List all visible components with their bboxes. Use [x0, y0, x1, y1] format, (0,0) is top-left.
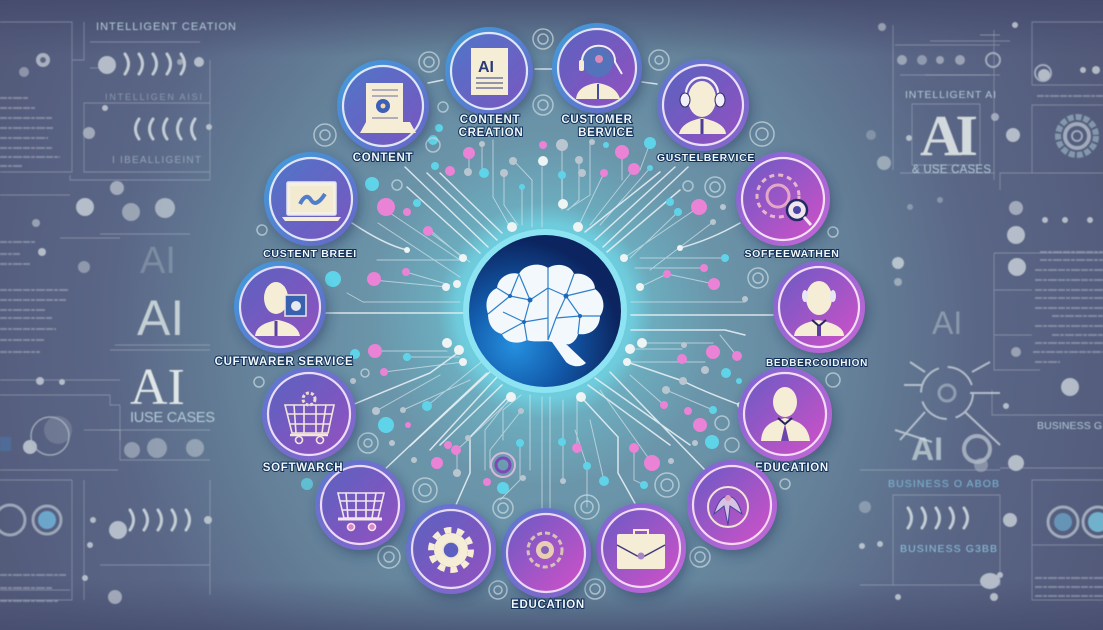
label: business garbled: BEDBERCOIDHION [766, 358, 868, 369]
icon: person with headset [679, 78, 726, 134]
icon: network gear [528, 533, 562, 567]
hub ring and core [463, 229, 627, 393]
icon: gear with magnifier [757, 175, 811, 225]
node: headset agent [657, 59, 749, 151]
node: emblem [687, 460, 777, 550]
heading: intelligent creation: INTELLIGENT CEATION [96, 21, 237, 33]
node: customer with chip [234, 261, 326, 353]
label: creation: CREATION [459, 127, 523, 139]
heading: intelligent AI: INTELLIGENT AI [905, 89, 997, 101]
node: gear [406, 504, 496, 594]
node: education gear [501, 508, 591, 598]
chevron row [908, 508, 968, 528]
node: bald man [773, 261, 865, 353]
rays: upper right [562, 142, 773, 315]
label: customer: CUSTOMER [561, 114, 633, 126]
radiating circuit lines [323, 140, 773, 510]
label: service: BERVICE [578, 127, 634, 139]
cyan dots [301, 124, 742, 494]
node: education man [738, 367, 832, 461]
label: customer service garbled: GUSTELBERVICE [657, 152, 755, 164]
label: software search: SOFTWARCH [263, 462, 343, 474]
node: laptop [264, 152, 358, 246]
circuit frames [859, 22, 1103, 601]
node: software [736, 152, 830, 246]
label: education bottom: EDUCATION [511, 599, 585, 611]
label: education right: EDUCATION [755, 462, 829, 474]
icon: shopping cart [338, 493, 384, 530]
icon: brain [486, 265, 603, 366]
label: software garbled: SOFFEEWATHEN [744, 248, 840, 260]
serif AI mark: AI [130, 359, 185, 416]
label: content brief garbled: CUSTENT BREEI [263, 248, 357, 260]
white and grey dots [349, 156, 743, 408]
icon: gear [431, 530, 471, 570]
circuit frames [0, 22, 212, 604]
node connector lines [428, 69, 657, 84]
faint label: intelligent lower: I IBEALLIGEINT [112, 155, 202, 166]
business label: BUSINESS O ABOB [888, 478, 1000, 490]
rays: upper left [323, 140, 562, 313]
large AI mark: AI [137, 290, 184, 346]
central brain hub [463, 229, 627, 393]
dial graphic [895, 362, 1000, 445]
business label right: BUSINESS G [1037, 420, 1103, 432]
faint AI mark: AI [932, 305, 962, 341]
small ring icons [254, 29, 840, 599]
chevron row middle [136, 119, 195, 139]
node: shopping cart upper [262, 367, 356, 461]
use cases caption: & USE CASES [912, 164, 992, 176]
node: shopping cart lower [315, 460, 405, 550]
icon: laptop [282, 182, 341, 221]
icon: cart with gear [285, 393, 334, 444]
AI near dial: AI [911, 431, 943, 467]
icon: person with chip [255, 282, 306, 336]
use cases caption: IUSE CASES [130, 410, 216, 426]
label: software service garbled: CUFTWARER SERVICE [215, 356, 353, 368]
panel: right circuit decoration [859, 22, 1103, 601]
icon: AI document: AI [478, 59, 494, 76]
label: content: CONTENT [353, 152, 413, 164]
faint label: intelligent: INTELLIGEN AISI [105, 92, 203, 102]
bold AI mark: AI [920, 103, 978, 168]
node: content [337, 60, 429, 152]
icon: business person [794, 281, 844, 336]
central glow [370, 136, 720, 486]
icon: document with chip [360, 83, 416, 133]
rays: lower left [352, 351, 542, 510]
icon: agent with microphone [576, 46, 622, 99]
circuit dots [254, 29, 840, 599]
label: content creation: CONTENT [460, 114, 520, 126]
business label lower: BUSINESS G3BB [900, 543, 998, 555]
chevron row upper [125, 54, 184, 74]
node: briefcase [596, 503, 686, 593]
node: content creation [445, 27, 533, 115]
icon: man with tie [761, 387, 810, 441]
icon: shield emblem [708, 487, 748, 527]
node: customer [552, 23, 642, 113]
faint AI mark: AI [140, 240, 176, 282]
panel: left circuit decoration [0, 21, 237, 604]
rays: lower right [550, 330, 745, 510]
chevron row lower [130, 510, 190, 530]
pink dots [367, 141, 742, 486]
icon: briefcase [617, 530, 665, 569]
